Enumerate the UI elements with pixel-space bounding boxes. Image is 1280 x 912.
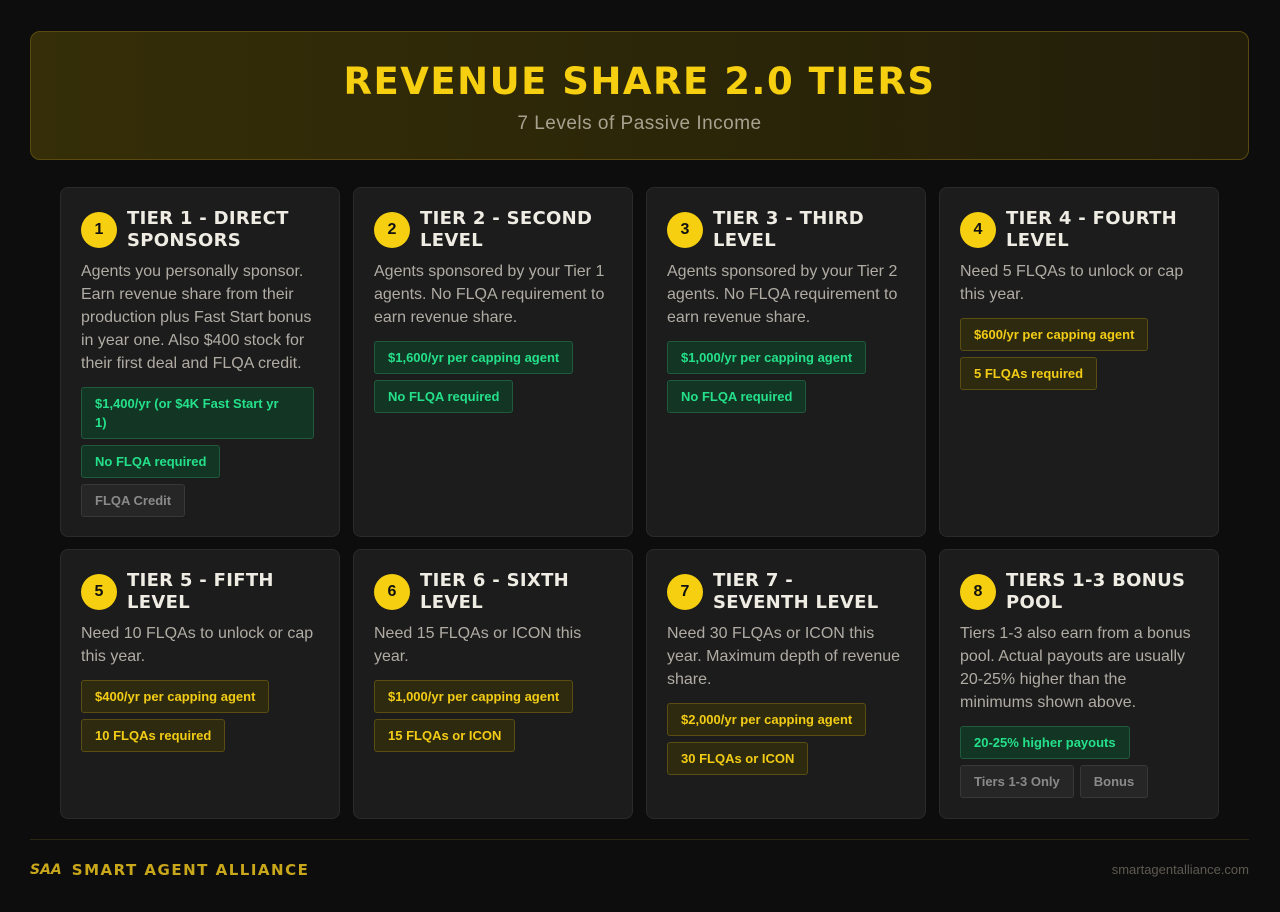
panel: tier 2: 2	[388, 221, 396, 238]
panel: bonus pool: TIERS 1-3 BONUS	[1006, 570, 1185, 591]
panel: tier 1	[60, 187, 340, 537]
header banner	[30, 31, 1249, 160]
panel: bonus pool: Tiers 1-3 also earn from a bonus pool. Actual payouts are usually 20-25% higher than the minimums shown above.	[960, 625, 1191, 711]
panel: tier 1: Agents you personally sponsor. Earn revenue share from their production plus Fast Start bonus in year one. Also $400 stock for their first deal and FLQA credit.	[81, 263, 311, 372]
panel: tier 4	[939, 187, 1219, 537]
panel: tier 7: TIER 7 -	[713, 570, 793, 591]
footer brand: SMART AGENT ALLIANCE	[72, 861, 309, 879]
panel: tier 1: No FLQA required	[95, 454, 206, 469]
panel: tier 6: $1,000/yr per capping agent	[388, 689, 559, 704]
panel: tier 5: TIER 5 - FIFTH LEVEL	[127, 570, 274, 613]
panel: tier 5: Need 10 FLQAs to unlock or cap this year.	[81, 625, 313, 665]
panel: tier 1: $1,400/yr (or $4K Fast Start yr	[95, 396, 279, 411]
panel: tier 2	[353, 187, 633, 537]
panel: tier 4: 5 FLQAs required	[974, 366, 1083, 381]
panel: tier 5: 5	[95, 583, 103, 600]
panel: tier 6: Need 15 FLQAs or ICON this year.	[374, 625, 581, 665]
panel: tier 1: FLQA Credit	[95, 493, 171, 508]
panel: tier 6: 15 FLQAs or ICON	[388, 728, 501, 743]
title: REVENUE SHARE 2.0 TIERS	[343, 60, 936, 103]
panel: tier 6: 6	[388, 583, 396, 600]
panel: tier 6	[353, 549, 633, 819]
panel: tier 7: SEVENTH LEVEL	[713, 592, 879, 613]
panel: tier 3: $1,000/yr per capping agent	[681, 350, 852, 365]
panel: tier 1: TIER 1 - DIRECT SPONSORS	[127, 208, 289, 251]
subtitle: 7 Levels of Passive Income	[517, 113, 762, 134]
panel: tier 7: $2,000/yr per capping agent	[681, 712, 852, 727]
panel: tier 7	[646, 549, 926, 819]
panel: bonus pool: 8	[974, 583, 982, 600]
panel: tier 3: No FLQA required	[681, 389, 792, 404]
panel: tier 7: 30 FLQAs or ICON	[681, 751, 794, 766]
panel: tier 5	[60, 549, 340, 819]
panel: tier 2: $1,600/yr per capping agent	[388, 350, 559, 365]
panel: bonus pool	[939, 549, 1219, 819]
panel: tier 3: 3	[681, 221, 689, 238]
panel: tier 6: TIER 6 - SIXTH LEVEL	[420, 570, 569, 613]
panel: tier 2: Agents sponsored by your Tier 1 agents. No FLQA requirement to earn revenue share.	[374, 263, 604, 326]
panel: tier 4: 4	[974, 221, 982, 238]
panel: tier 7: 7	[681, 583, 689, 600]
panel: tier 4: $600/yr per capping agent	[974, 327, 1134, 342]
panel: tier 7: Need 30 FLQAs or ICON this year. Maximum depth of revenue share.	[667, 625, 900, 688]
panel: tier 1: 1)	[95, 415, 107, 430]
panel: tier 5: $400/yr per capping agent	[95, 689, 255, 704]
panel: tier 3: TIER 3 - THIRD LEVEL	[713, 208, 864, 251]
panel: tier 4: TIER 4 - FOURTH LEVEL	[1006, 208, 1177, 251]
panel: bonus pool: 20-25% higher payouts	[974, 735, 1116, 750]
panel: bonus pool: POOL	[1006, 592, 1062, 613]
panel: bonus pool: Tiers 1-3 Only	[974, 774, 1060, 789]
panel: bonus pool: Bonus	[1094, 774, 1134, 789]
footer url: smartagentalliance.com	[1112, 862, 1249, 877]
panel: tier 4: Need 5 FLQAs to unlock or cap this year.	[960, 263, 1183, 303]
panel: tier 2: No FLQA required	[388, 389, 499, 404]
footer brand: SAA	[30, 862, 62, 878]
panel: tier 5: 10 FLQAs required	[95, 728, 211, 743]
panel: tier 3: Agents sponsored by your Tier 2 agents. No FLQA requirement to earn revenue share.	[667, 263, 897, 326]
panel: tier 1: 1	[95, 221, 103, 238]
panel: tier 3	[646, 187, 926, 537]
panel: tier 2: TIER 2 - SECOND LEVEL	[420, 208, 592, 251]
